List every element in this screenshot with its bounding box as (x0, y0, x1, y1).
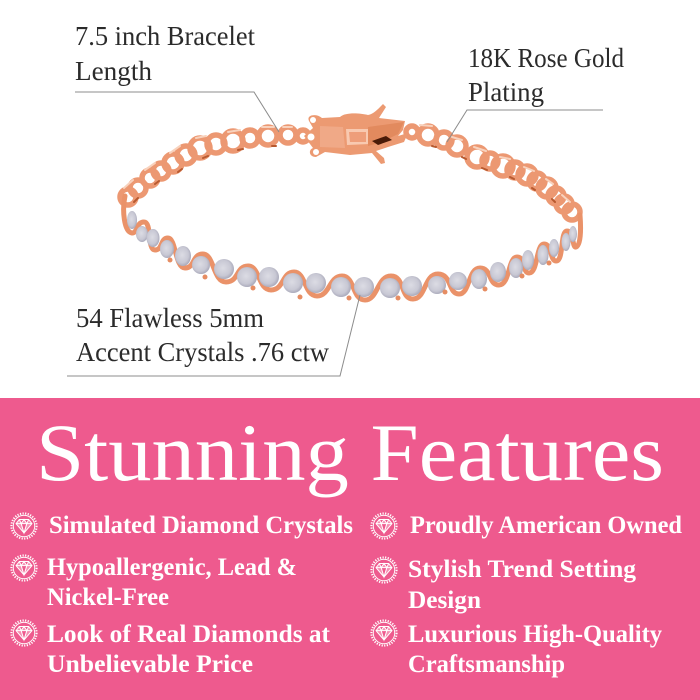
bracelet (120, 104, 581, 300)
feature: simulated diamond crystals: Simulated Diamond Crystals (49, 512, 353, 539)
prongs (168, 258, 552, 300)
crystals (127, 211, 577, 298)
callout: rose gold plating: 18K Rose Gold (468, 43, 624, 73)
feature: stylish design: Design (408, 587, 481, 614)
feature: stylish design: Stylish Trend Setting (408, 556, 637, 583)
feature: craftsmanship: Craftsmanship (408, 651, 565, 678)
feature: look of real diamonds (11, 620, 331, 678)
clasp (304, 104, 408, 164)
feature: look of real diamonds: Unbelievable Price (47, 651, 253, 678)
feature: hypoallergenic (11, 554, 297, 611)
callout: rose gold plating (447, 43, 624, 142)
back chain (120, 125, 580, 220)
feature: craftsmanship: Luxurious High-Quality (408, 621, 662, 648)
feature: hypoallergenic: Hypoallergenic, Lead & (47, 554, 297, 581)
feature: hypoallergenic: Nickel-Free (47, 584, 169, 611)
gold s-wave setting (124, 196, 581, 300)
feature: american owned: Proudly American Owned (410, 512, 682, 539)
callout: accent crystals: 54 Flawless 5mm (76, 303, 264, 333)
callout: accent crystals: Accent Crystals .76 ctw (76, 337, 329, 367)
callout: bracelet length (75, 21, 279, 132)
feature: stylish design (371, 556, 637, 614)
heading: Stunning Features (36, 407, 664, 498)
callout: bracelet length: 7.5 inch Bracelet (75, 21, 255, 51)
feature: look of real diamonds: Look of Real Diamonds at (47, 621, 331, 648)
callout: bracelet length: Length (75, 56, 152, 86)
feature: craftsmanship (371, 620, 662, 678)
callout: rose gold plating: Plating (468, 77, 544, 107)
callout: accent crystals (67, 295, 360, 376)
